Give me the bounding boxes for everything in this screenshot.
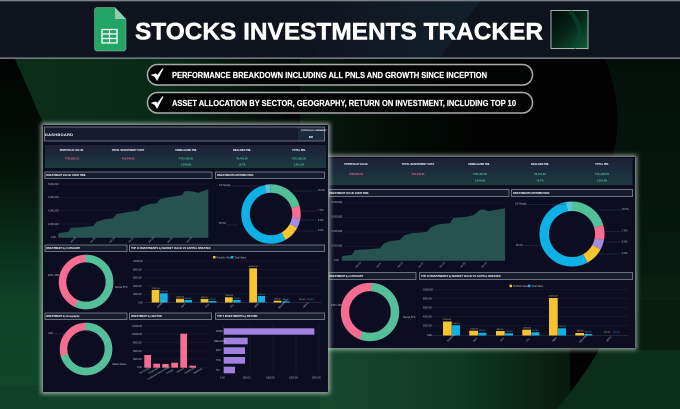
heading: distribution: INVESTMENTS DISTRIBUTION [513,192,549,195]
area chart: Jan-23 [439,261,446,269]
kpi strip [45,145,326,168]
bar chart: top investments: 0.00 [138,302,143,304]
bar chart: sector: 4000.00 [133,358,142,361]
feature pill 1: PERFORMANCE BREAKDOWN INCLUDING ALL PNLS AND GROWTH SINCE INCEPTION [172,71,487,80]
area chart: 8,000,000 [332,201,343,204]
donut category labels: ETFs 43% [48,274,60,277]
area chart: 6,000,000 [332,216,343,218]
donut category labels: Stocks 57% [403,316,416,319]
donut: geography [64,326,108,372]
bar chart: top investments [133,256,322,310]
heading: top investments [420,272,632,280]
bar chart: top investments: RELIANCE [579,333,589,344]
area chart: Jan-22 [397,261,404,269]
bar chart: top investments: 120.00 [613,332,620,334]
heading: top 5 [216,313,324,320]
bar chart: top investments: 980.00 [497,329,504,331]
donut geography labels: United States [112,363,127,366]
area chart: Jul-22 [128,237,135,244]
bar chart: sector: 0.00 [137,366,142,369]
bar chart: top investments: 1280.00 [225,295,234,297]
heading: by category [329,272,416,280]
donut labels: 9.0% [622,252,628,255]
kpi strip: 16.7% [238,164,246,166]
heading: top 5: TOP 5 INVESTMENTS by RETURN [217,315,258,318]
bar chart: top investments: 480.00 [577,330,584,332]
kpi strip: TOTAL PNL [292,149,306,152]
bar chart: sector: Energy [166,368,175,375]
area chart: 2,000,000 [48,223,59,226]
area chart: Jan-21 [70,236,77,244]
bar chart: top 5: 2000.00 [312,376,321,380]
kpi strip: REALIZED PNL [531,163,550,166]
heading: value over time: INVESTMENT VALUE OVER TIME [46,174,86,177]
bar chart: top 5: RELIANCE [214,340,226,343]
check icon [152,96,163,108]
legend: Total Value [532,285,544,288]
bar chart: top investments: 640.00 [185,298,192,300]
bar chart: top investments: 4000.00 [423,316,432,318]
bar chart: top investments: 8000.00 [423,298,432,300]
area chart: Jul-21 [90,237,97,244]
bar chart: top investments: 10250.00 [248,266,258,268]
heading: value over time [45,172,212,178]
icon: google sheets [94,8,126,51]
kpi strip: ₹711,893.50 [595,172,610,176]
kpi strip: PORTFOLIO VALUE [344,163,368,166]
bar chart: top 5: ZOMA [216,330,223,333]
heading: by geography: INVESTMENT by Geography [46,315,80,318]
bar chart: top investments: HDFC [303,302,310,309]
kpi strip [329,158,632,185]
bar chart: top investments: 3250.00 [152,288,160,290]
bar chart: sector [132,325,210,381]
bar chart: top investments: 2400.00 [160,291,169,293]
kpi strip: 1,244.6% [181,164,192,166]
bar chart: sector: Financials [148,366,160,375]
bar chart: top investments: SBIN [552,336,558,343]
bar chart: top investments: 500.00 [209,299,217,301]
area chart: Jul-21 [376,262,383,269]
kpi strip: ₹56,440.80 [122,156,135,160]
kpi strip: 1,244.6% [475,180,486,182]
heading: by sector: INVESTMENT by SECTOR [131,315,162,318]
bar chart: top investments: 980.00 [201,297,209,299]
bar chart: top investments [423,285,628,344]
bar chart: top investments: 2000.00 [133,293,142,296]
legend: Portfolio Value [513,285,529,288]
heading: top investments: TOP 10 INVESTMENTS by MARKET VALUE VS CAPITAL INVESTED [421,275,501,278]
kpi strip: UNREALIZED PNL [175,149,197,152]
heading: by geography [45,313,127,320]
legend [213,256,247,259]
bar chart: top investments: 1280.00 [523,328,532,330]
area chart: 2,000,000 [332,244,343,248]
donut geography labels: USA [48,332,53,335]
bar chart: top 5: 0.00 [220,376,225,380]
donut: distribution [544,206,600,262]
check icon [152,68,163,80]
dashboard title bar: PORTFOLIO CURRENCY [301,130,327,132]
donut labels: US Stocks [219,184,231,187]
donut category labels [331,304,416,319]
kpi strip: TOTAL INVESTMENT COST [112,149,145,152]
bar chart: top investments: 8000.00 [133,268,142,272]
bar chart: top investments: 1700.00 [257,294,266,296]
bar chart: top investments: 1050.00 [470,328,479,330]
heading: by category: INVESTMENT by CATEGORY [46,247,81,250]
donut labels [515,202,630,255]
area chart: Jul-22 [418,262,425,269]
bar chart: sector: 8000.00 [133,342,142,344]
area chart: Jul-23 [460,262,467,269]
bar chart: top investments: RELIANCE [278,299,288,310]
bar chart: top investments: 710.00 [234,298,241,300]
heading: top investments: TOP 10 INVESTMENTS by MARKET VALUE VS CAPITAL INVESTED [131,247,211,250]
bar chart: top investments: SBIN [254,302,260,309]
bar chart: top investments: 300.00 [283,299,290,301]
dashboard title bar [44,127,327,141]
bar chart: top investments: ZOMATO [157,299,166,309]
panel: dashboard right [320,155,637,350]
kpi strip: 1,261.3% [294,164,305,166]
kpi strip: TOTAL PNL [595,163,609,166]
bar chart: top 5: ITC [216,369,220,372]
kpi strip: ₹702,452.60 [473,172,488,176]
dashboard title bar: INR [309,136,313,139]
bar chart: sector: 6000.00 [133,350,142,353]
donut labels: 20.5% [622,208,630,211]
heading: distribution: INVESTMENTS DISTRIBUTION [217,174,253,177]
bar chart: top investments: ITC [526,338,531,343]
bar chart: sector: Materials [193,367,204,375]
bar chart: sector: Healthcare [184,366,196,375]
kpi strip: ₹711,893.50 [292,156,307,160]
bar chart: sector: Consumer Discretionary [147,365,171,381]
donut labels: 7.5% [318,209,324,212]
feature pill 2: ASSET ALLOCATION BY SECTOR, GEOGRAPHY, RETURN ON INVESTMENT, INCLUDING TOP 10 [172,99,517,108]
bar chart: top investments: 710.00 [532,330,539,332]
legend: Total Value [234,256,247,259]
area chart: 6,000,000 [48,196,59,199]
kpi strip: UNREALIZED PNL [468,163,490,166]
heading: top investments [130,245,324,252]
donut: category [345,287,395,337]
donut category labels: Stocks 57% [115,286,128,289]
bar chart: top investments: 0.00 [427,334,432,337]
kpi strip: REALIZED PNL [233,149,252,152]
area chart: Jan-23 [148,236,155,244]
area chart: 8,000,000 [48,183,59,186]
donut labels: 20.5% [318,189,326,192]
heading: by category [45,245,127,252]
area chart [332,201,505,269]
donut: category [62,258,110,306]
heading: value over time: INVESTMENT VALUE OVER TIME [329,192,369,195]
donut category labels [48,274,128,289]
donut labels [219,184,326,232]
kpi strip: ₹56,440.80 [412,172,425,176]
donut geography labels [48,332,127,366]
bar chart: sector: 12000.00 [132,325,143,328]
kpi strip: ₹758,893.52 [65,156,80,160]
bar chart: top 5: TCS [216,359,221,362]
heading: distribution [512,190,632,196]
bar chart: top investments: 120.00 [307,299,314,301]
area chart [48,183,209,244]
area chart: Jan-21 [355,261,362,269]
donut labels: 5.0% [622,240,628,244]
kpi strip: 16.7% [536,180,544,182]
feature pill 2 [148,92,532,113]
bar chart: top investments: 3250.00 [443,319,452,321]
bar chart: top investments: 4000.00 [133,285,142,288]
heading: distribution [216,172,324,178]
bar chart: top investments: 10000.00 [423,288,434,292]
donut: distribution [246,188,296,240]
bar chart: top investments: 2000.00 [423,324,432,328]
donut labels: 55.0% [516,244,524,247]
thumbnail icon [551,10,588,48]
donut labels: 7.5% [622,230,628,232]
heading: by sector [130,313,212,320]
bar chart: sector: 10000.00 [132,333,143,336]
bar chart: top investments: HDFC [606,336,613,343]
bar chart: sector: Technology [139,366,152,375]
donut category labels: ETFs 43% [331,304,343,307]
area chart: 4,000,000 [48,210,59,212]
legend [510,285,544,288]
title: STOCKS INVESTMENTS TRACKER [135,18,543,46]
bar chart: top investments: TCS [500,337,505,343]
kpi strip: ₹9,441.00 [236,156,248,160]
area chart: Jan-24 [481,261,488,269]
bar chart: top investments: 1700.00 [558,326,567,328]
bar chart: top 5: 500.00 [243,376,251,380]
bar chart: top 5: 1000.00 [266,376,275,380]
heading: value over time [329,190,509,196]
bar chart: top investments: 2400.00 [452,323,461,325]
panel: dashboard left [41,123,330,394]
donut labels: US Stocks [515,202,527,206]
bar chart: top investments: 480.00 [274,298,282,300]
kpi strip: ₹9,441.00 [534,172,546,176]
bar chart: top investments: 130.00 [604,332,611,334]
bar chart: top investments: 10000.00 [133,260,144,263]
bar chart: top investments: INFY [473,336,479,343]
bar chart: top investments: ITC [230,304,235,309]
bar chart: top 5 [214,324,321,380]
kpi strip: 1,261.3% [597,180,608,182]
kpi strip: ₹758,893.52 [349,172,364,176]
header band [0,0,680,59]
bar chart: top investments: 6000.00 [423,306,432,310]
dashboard title bar: DASHBOARD [45,132,73,137]
bar chart: top 5: 1500.00 [289,376,298,380]
area chart: 0.00 [51,236,56,239]
bar chart: top investments: 10250.00 [548,296,558,298]
bar chart: top 5: INFY [216,349,222,352]
bar chart: top investments: INFY [181,302,187,309]
feature pill 1 [148,64,532,85]
bar chart: top investments: 6000.00 [133,276,142,280]
area chart: 4,000,000 [332,230,343,233]
donut labels: 5.0% [318,219,324,222]
bar chart: top investments: 130.00 [299,299,306,301]
area chart: Jul-23 [167,237,174,244]
bar chart: sector: Internet [176,367,185,374]
kpi strip: PORTFOLIO VALUE [60,149,84,152]
kpi strip: ₹702,452.60 [179,156,194,160]
area chart: 0.00 [334,259,339,262]
donut labels: 55.0% [219,222,227,225]
bar chart: top investments: 500.00 [506,331,513,333]
heading: by category: INVESTMENT by CATEGORY [329,275,364,278]
bar chart: top investments: 1050.00 [176,296,185,298]
donut labels: 9.0% [318,229,324,232]
bar chart: top investments: 640.00 [479,330,486,332]
bar chart: top investments: 300.00 [585,332,592,334]
legend: Portfolio Value [216,256,233,259]
area chart: Jan-24 [186,236,193,244]
area chart: Jan-22 [109,236,116,244]
bar chart: top investments: TCS [205,303,210,309]
kpi strip: TOTAL INVESTMENT COST [402,163,435,166]
bar chart: top investments: ZOMATO [447,333,456,343]
